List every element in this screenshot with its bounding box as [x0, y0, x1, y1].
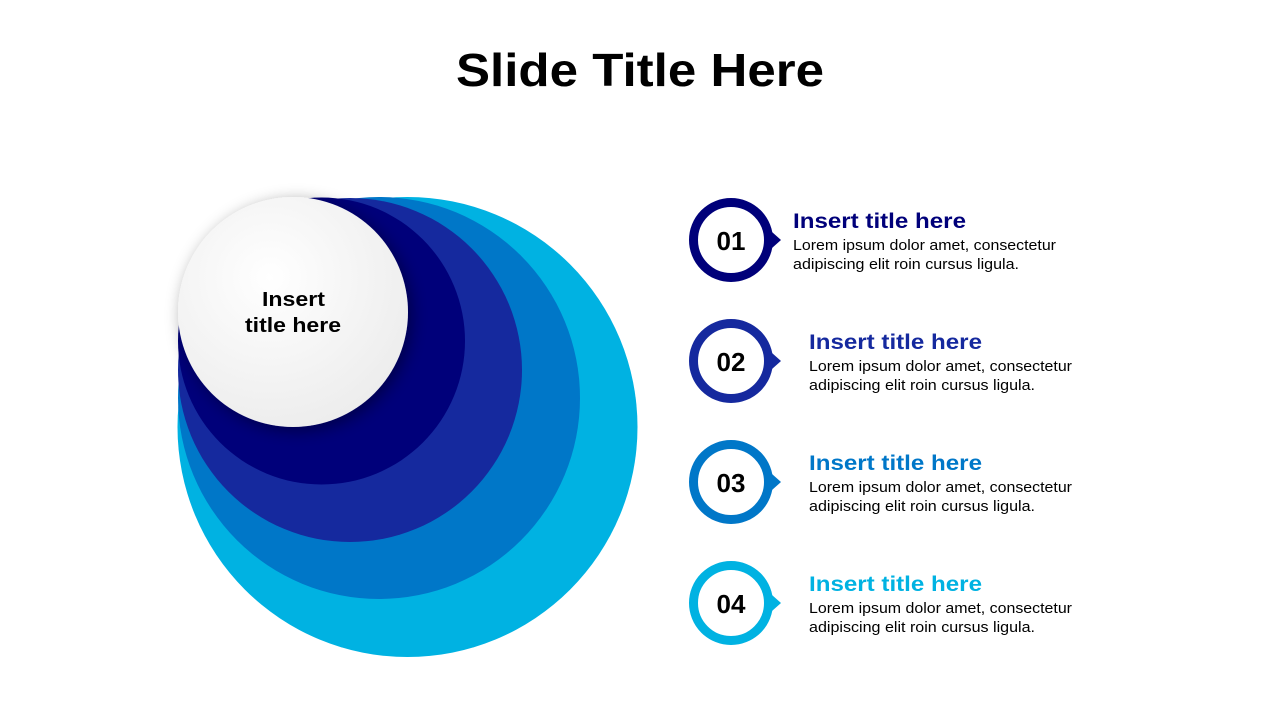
item 03: Lorem ipsum dolor amet, consectetur — [809, 479, 1072, 496]
marker 04: 04 — [717, 589, 746, 619]
marker 02: 02 — [717, 347, 745, 377]
item 04: Insert title here — [809, 573, 982, 596]
item 01: adipiscing elit roin cursus ligula. — [793, 256, 1019, 273]
item 01 — [694, 202, 1056, 278]
center white circle: Insert — [262, 289, 325, 311]
marker 01: 01 — [717, 226, 745, 256]
item 02: Lorem ipsum dolor amet, consectetur — [809, 358, 1072, 375]
marker 02 — [694, 324, 781, 398]
center white circle — [178, 197, 408, 427]
item 03: Insert title here — [809, 452, 982, 475]
marker 04 — [694, 566, 781, 640]
item 02: adipiscing elit roin cursus ligula. — [809, 377, 1035, 394]
marker 03: 03 — [717, 468, 745, 498]
item 04: adipiscing elit roin cursus ligula. — [809, 619, 1035, 636]
item 02: Insert title here — [809, 331, 982, 354]
title: Slide Title Here — [456, 44, 824, 96]
center white circle: title here — [245, 315, 341, 337]
item 03 — [694, 444, 1072, 520]
concentric circles graphic — [178, 197, 638, 657]
item 01: Insert title here — [793, 210, 966, 233]
marker 03 — [694, 444, 781, 520]
marker 01 — [694, 202, 781, 278]
item 01: Lorem ipsum dolor amet, consectetur — [793, 237, 1056, 254]
item 03: adipiscing elit roin cursus ligula. — [809, 498, 1035, 515]
item 04 — [694, 566, 1072, 640]
item 02 — [694, 324, 1072, 398]
item 04: Lorem ipsum dolor amet, consectetur — [809, 600, 1072, 617]
